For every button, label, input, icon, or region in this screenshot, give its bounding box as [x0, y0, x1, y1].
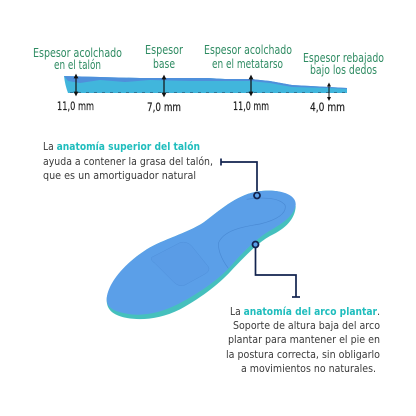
text block: arch anatomy: La anatomía del arco plantar. — [230, 305, 380, 318]
heading: heel thickness: Espesor acolchado — [33, 46, 122, 60]
value: heel: 11,0 mm — [57, 99, 94, 113]
insole edge — [107, 191, 296, 319]
heading: metatarsal thickness: en el metatarso — [212, 57, 283, 71]
callout line: heel — [221, 158, 260, 198]
heading: heel thickness — [33, 46, 122, 72]
arrow: base — [163, 77, 165, 95]
text block: heel anatomy — [43, 140, 213, 182]
heading: metatarsal thickness — [204, 43, 292, 71]
value: toes: 4,0 mm — [310, 100, 345, 114]
heading: base thickness: base — [153, 57, 175, 71]
value: metatarsal: 11,0 mm — [233, 99, 269, 113]
text block: arch anatomy: la postura correcta, sin obligarlo — [226, 348, 380, 361]
metatarsal pad — [151, 242, 209, 286]
heading: toe thickness — [303, 51, 384, 77]
insole illustration — [107, 191, 296, 319]
text block: heel anatomy: ayuda a contener la grasa del talón, — [43, 155, 213, 168]
arrow: toes — [328, 84, 330, 99]
text block: arch anatomy: plantar para mantener el pie en — [228, 333, 380, 346]
text block: arch anatomy — [226, 305, 380, 375]
arrow: metatarsal — [250, 77, 252, 94]
heading: base thickness — [145, 43, 183, 71]
text block: heel anatomy: que es un amortiguador natural — [43, 169, 196, 182]
text block: arch anatomy: a movimientos no naturales. — [241, 362, 376, 375]
heading: metatarsal thickness: Espesor acolchado — [204, 43, 292, 57]
insole top surface — [107, 191, 296, 315]
heading: heel thickness: en el talón — [54, 58, 101, 72]
heading: base thickness: Espesor — [145, 43, 183, 57]
arrow: heel — [75, 76, 77, 94]
callout line: arch — [252, 242, 300, 297]
heading: toe thickness: Espesor rebajado — [303, 51, 384, 65]
heel cup and arch contour — [218, 198, 285, 268]
thickness profile section — [33, 43, 384, 114]
heading: toe thickness: bajo los dedos — [310, 63, 377, 77]
insole side profile — [64, 76, 347, 93]
value: base: 7,0 mm — [147, 100, 181, 114]
text block: heel anatomy: La anatomía superior del talón — [43, 140, 200, 153]
text block: arch anatomy: Soporte de altura baja del arco — [233, 319, 380, 332]
